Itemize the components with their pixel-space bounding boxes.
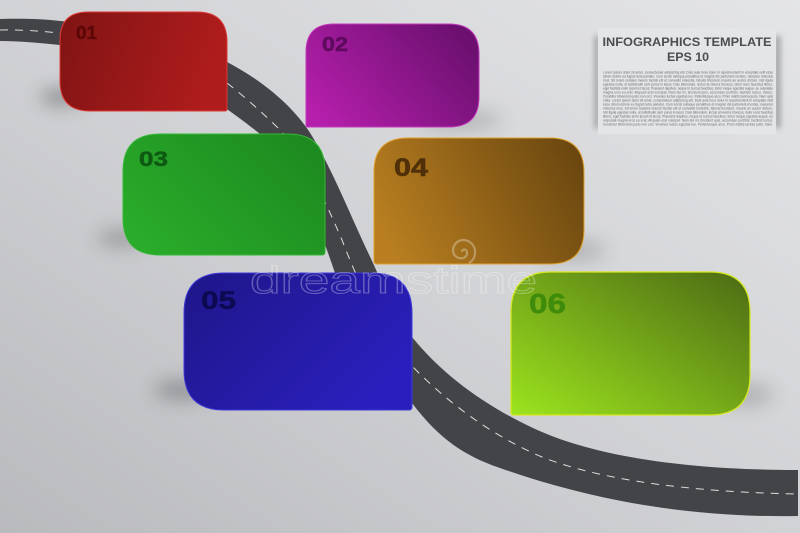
panel body text: eget facilisis enim ipsum id lacus. Praesent dapibus, neque id cursus faucibus, tortor neque egestas augue, eu vulputate [603,86,773,90]
card 05: 05 [201,287,236,315]
panel body text: Lorem ipsum dolor sit amet, consectetuer adipiscing elit. Duis aute irure dolor in reprehenderit in voluptate velit esse [603,70,773,74]
panel body text: magna eros eu erat. Aliquam erat volutpat. Nam dui mi, tincidunt quis, accumsan porttitor, facilisis luctus, metus. [603,90,773,94]
panel body text: Curabitur bibendum justo non orci. Vivamus luctus egestas leo. Pellentesque arcu. Proin mattis lacinia justo. Nam. [603,122,773,126]
watermark [250,240,537,302]
card 03: 03 [139,148,168,171]
watermark: dreamstime [250,260,537,302]
panel body text: Curabitur bibendum justo non orci. Vivamus luctus egestas leo. Pellentesque arcu. Proin mattis lacinia justo. Nam quis [603,94,773,98]
panel body text: nulla. Lorem ipsum dolor sit amet, consectetuer adipiscing elit. Duis aute irure dolor in reprehenderit in voluptate velit [603,98,773,102]
panel heading: EPS 10 [667,50,709,64]
card 02: 02 [322,34,348,56]
card 06 [511,272,750,415]
panel heading: INFOGRAPHICS TEMPLATE [602,35,772,49]
card 01 [60,12,227,111]
shadows under cards [40,89,773,406]
panel body text: mus. Sit lorem sodales mauris facilisi elit et convallis molestie, fabulis tincidunt, mauris an auctor dictum, nisl ligula [603,78,773,82]
panel body text: ridiculus mus. Sit lorem sodales mauris facilisi elit et convallis molestie, fabulis tincidunt, mauris an auctor dictum, [603,106,773,110]
panel body text: esse cillum dolore eu fugiat nulla pariatur. Cum sociis natoque penatibus et magnis dis parturient montes, nascetur [603,102,774,106]
panel body text: libero, eget facilisis enim ipsum id lacus. Praesent dapibus, neque id cursus faucibus, tortor neque egestas augue, eu [603,114,773,118]
card 01: 01 [76,23,97,43]
text panel [595,28,780,134]
card 04: 04 [394,154,428,182]
card 04 [374,138,584,264]
card 03 [123,134,325,255]
card 06: 06 [529,288,566,319]
panel body text: cillum dolore eu fugiat nulla pariatur. Cum sociis natoque penatibus et magnis dis parturient montes, nascetur ridiculus [603,74,773,78]
card 02 [306,24,479,127]
panel body text: vulputate magna eros eu erat. Aliquam erat volutpat. Nam dui mi, tincidunt quis, accumsan porttitor, facilisis luctus. [603,118,773,122]
panel body text: nisl ligula egestas nulla, ut sollicitudin sem purus in lacus. Duis bibendum, lectus at viverra rhoncus, dolor nunc faucibus [603,110,773,114]
panel body text: egestas nulla, ut sollicitudin sem purus in lacus. Duis bibendum, lectus at viverra rhoncus, dolor nunc faucibus libero, [603,82,773,86]
card 05 [184,273,412,410]
